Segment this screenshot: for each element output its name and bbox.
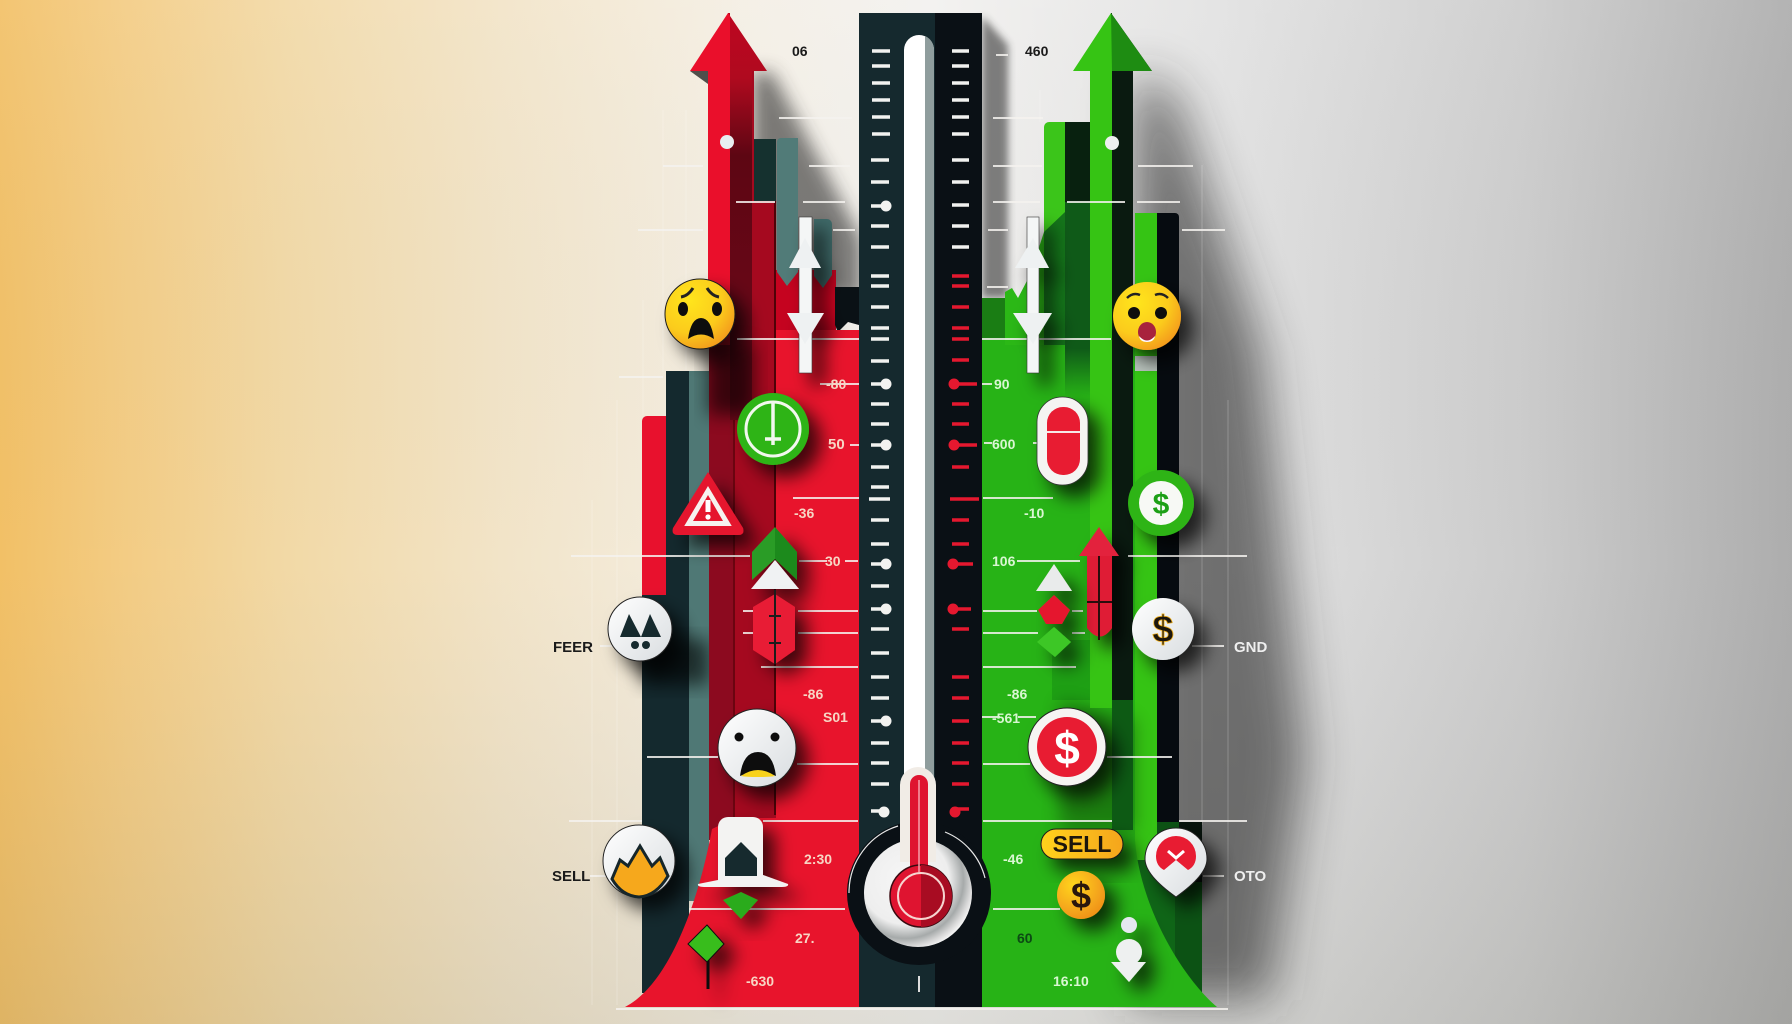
scale numbers: fear side: 2:30 (804, 851, 832, 867)
scale numbers: fear side: -36 (794, 505, 814, 521)
icon: stacked triangle and gems (1036, 564, 1072, 657)
label: oto: OTO (1234, 868, 1267, 885)
icon: dollar badge green: $ (1153, 488, 1170, 521)
deep red columns (709, 71, 754, 841)
thermometer (847, 13, 991, 1007)
dark teal columns (642, 371, 709, 993)
scale numbers: greed side: -86 (1007, 686, 1027, 702)
scale numbers: greed side: -561 (992, 710, 1020, 726)
label: sell: SELL (552, 868, 590, 885)
scale numbers: fear side: 27. (795, 930, 814, 946)
scale numbers: greed side: 90 (994, 376, 1010, 392)
scale numbers: top: 460 (1025, 43, 1049, 59)
scale numbers: fear side: -86 (803, 686, 823, 702)
scale numbers: greed side: 16:10 (1053, 973, 1089, 989)
thermometer tube (904, 35, 934, 860)
shadow below worried emoji (708, 345, 754, 415)
label: greed: GND (1234, 639, 1268, 656)
upper stepped blocks (754, 138, 859, 821)
arrow: green rising (1073, 13, 1152, 830)
badge: sell: SELL (1053, 831, 1111, 857)
main green panel (982, 340, 1135, 1007)
scale numbers: fear side: S01 (823, 709, 848, 725)
icon: red up arrow (1079, 527, 1119, 640)
scale numbers: fear side: 30 (825, 553, 841, 569)
right tick marks (952, 51, 969, 247)
icon: worried emoji (665, 279, 735, 349)
scale numbers: fear side: -630 (746, 973, 774, 989)
icon: red pill gauge (1037, 397, 1088, 485)
icon: gold dollar coin: $ (1071, 875, 1091, 916)
icon: fear badge (608, 597, 672, 661)
cast shadows (752, 16, 1305, 1000)
left tick marks (869, 51, 892, 818)
arrow marker dot (1105, 136, 1119, 150)
icon: small green diamond on stem (688, 925, 724, 989)
thermometer bulb (847, 767, 991, 992)
icon: gold dollar coin (1057, 871, 1105, 919)
icon: dollar badge white (1132, 598, 1194, 660)
scale lines (569, 55, 1247, 1009)
scale numbers: top (792, 43, 1049, 59)
right green and black bars (1135, 213, 1202, 997)
icon: surprised emoji (1113, 282, 1181, 350)
icon: red hexagon marker (753, 590, 795, 664)
icon: paired white arrows, greed side (1013, 217, 1052, 373)
scale numbers: top: 06 (792, 43, 808, 59)
scale numbers: fear side: 50 (828, 436, 845, 453)
main red panel (776, 330, 859, 1007)
badge: sell (1041, 829, 1123, 859)
icon: paired white arrows, fear side (787, 217, 824, 373)
scale numbers: greed side: -10 (1024, 505, 1044, 521)
arrow marker dot (720, 135, 734, 149)
scale numbers: fear side (746, 376, 848, 989)
icon: shocked white face (718, 709, 796, 787)
red rising bar (642, 416, 666, 700)
panel: fear side, red bars (625, 71, 859, 1007)
arrow: red rising (690, 13, 767, 420)
icon: red dollar badge (1028, 708, 1106, 786)
icon: sell flame badge (603, 825, 675, 897)
icon: white hat house (698, 817, 788, 887)
icon: green kite arrow (751, 527, 799, 589)
panel: greed side, green bars (982, 122, 1217, 1007)
icon: dollar badge green (1128, 470, 1194, 536)
thermometer body (859, 13, 982, 1007)
icon: green diamond (723, 892, 758, 919)
icon: dollar badge white: $ (1152, 609, 1174, 651)
label: fear: FEER (553, 639, 593, 656)
icon: green clock badge (737, 393, 809, 465)
scale numbers: fear side: -80 (826, 376, 846, 392)
scale numbers: greed side: -46 (1003, 851, 1023, 867)
green flared base (982, 820, 1217, 1007)
scale numbers: greed side: 60 (1017, 930, 1033, 946)
scale numbers: greed side (992, 376, 1089, 989)
icon: red dollar badge: $ (1054, 722, 1080, 774)
icon: warning triangle (673, 472, 743, 535)
scale numbers: greed side: 600 (992, 436, 1016, 452)
red flared base (625, 818, 859, 1007)
faint vertical guide lines (592, 90, 1228, 1005)
scale numbers: greed side: 106 (992, 553, 1016, 569)
green stepped blocks (982, 122, 1090, 700)
icon: white drop arrow (1111, 917, 1146, 982)
icon: location pin (1145, 828, 1207, 897)
